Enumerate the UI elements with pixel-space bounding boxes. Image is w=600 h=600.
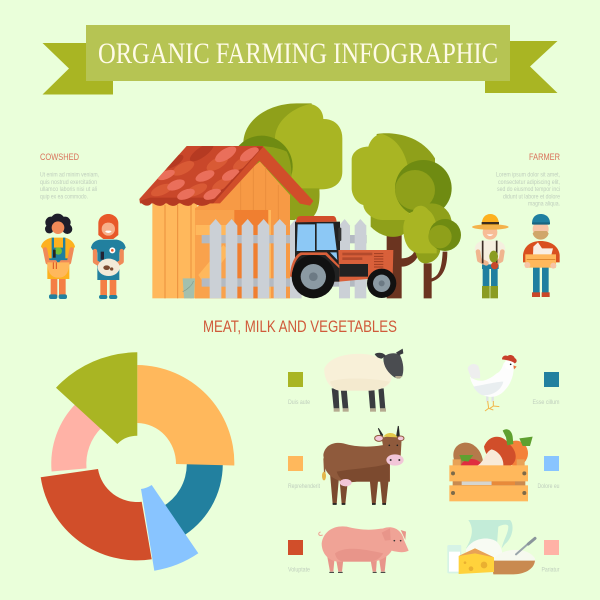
segment: red — [41, 469, 152, 560]
segment: teal — [162, 464, 223, 538]
dairy: jug, milk, cheese and bowl — [447, 520, 535, 574]
swatch: teal — [544, 372, 559, 387]
farmer text block: consectetur adipiscing elit, — [498, 179, 560, 186]
segment: olive — [56, 352, 137, 444]
swatch: light blue — [544, 456, 559, 471]
title ribbon — [42, 25, 558, 94]
cowshed text block: ullamco laboris nisi ut ali — [40, 186, 97, 193]
farmer text block: didunt ut labore et dolore — [503, 194, 560, 200]
donut chart — [41, 352, 234, 571]
title: ORGANIC FARMING INFOGRAPHIC — [98, 37, 498, 70]
animals column — [319, 349, 409, 572]
cow — [322, 426, 404, 504]
segment: light blue — [141, 485, 198, 571]
legend: right column: Esse cillum — [532, 399, 560, 406]
shed — [152, 162, 290, 298]
farmer text block: Lorem ipsum dolor sit amet, — [496, 172, 560, 178]
cowshed text block — [40, 152, 99, 200]
swatch: orange — [288, 456, 303, 471]
pig — [319, 526, 409, 572]
farmer in straw hat — [472, 214, 509, 298]
characters: two cowshed women — [41, 214, 126, 299]
section heading: MEAT, MILK AND VEGETABLES — [203, 318, 397, 336]
farm scene: shed, trees, fence and tractor — [139, 103, 461, 298]
tractor — [290, 216, 396, 298]
farmer text block: sed do eiusmod tempor inci — [497, 186, 560, 193]
legend: left column: Duis aute — [288, 399, 310, 406]
woman with dark hair — [41, 214, 75, 299]
white picket fence — [202, 219, 367, 298]
crate of vegetables — [449, 429, 533, 501]
swatch: red — [288, 540, 303, 555]
segment: pink — [51, 403, 101, 472]
legend: left column: Reprehenderit — [288, 483, 320, 490]
legend: right column: Pariatur — [542, 566, 560, 574]
front trees — [352, 133, 461, 298]
farmer text block — [496, 152, 560, 208]
farmer text block: magna aliqua. — [528, 200, 560, 208]
cowshed text block: Ut enim ad minim veniam, — [40, 172, 99, 178]
swatch: pink — [544, 540, 559, 555]
cowshed heading: COWSHED — [40, 152, 79, 163]
woman with red hair — [91, 214, 126, 299]
farmer heading: FARMER — [529, 152, 560, 163]
legend: left column: Voluptate — [288, 566, 310, 574]
back tree — [231, 103, 342, 220]
sheep — [324, 349, 403, 412]
segment: orange — [137, 365, 234, 466]
swatch: olive — [288, 372, 303, 387]
white hen — [468, 355, 517, 411]
bucket — [183, 278, 195, 298]
legend: right column: Dolore eu — [538, 483, 560, 490]
legend: left column — [288, 372, 320, 574]
legend: right column — [532, 372, 560, 574]
produce column — [447, 355, 535, 574]
farmer with crate — [523, 214, 560, 297]
cowshed text block: quis nostrud exercitation — [40, 179, 97, 186]
cowshed text block: quip ex ea commodo. — [40, 194, 88, 200]
roof — [139, 140, 313, 206]
characters: two farmers — [472, 214, 560, 298]
